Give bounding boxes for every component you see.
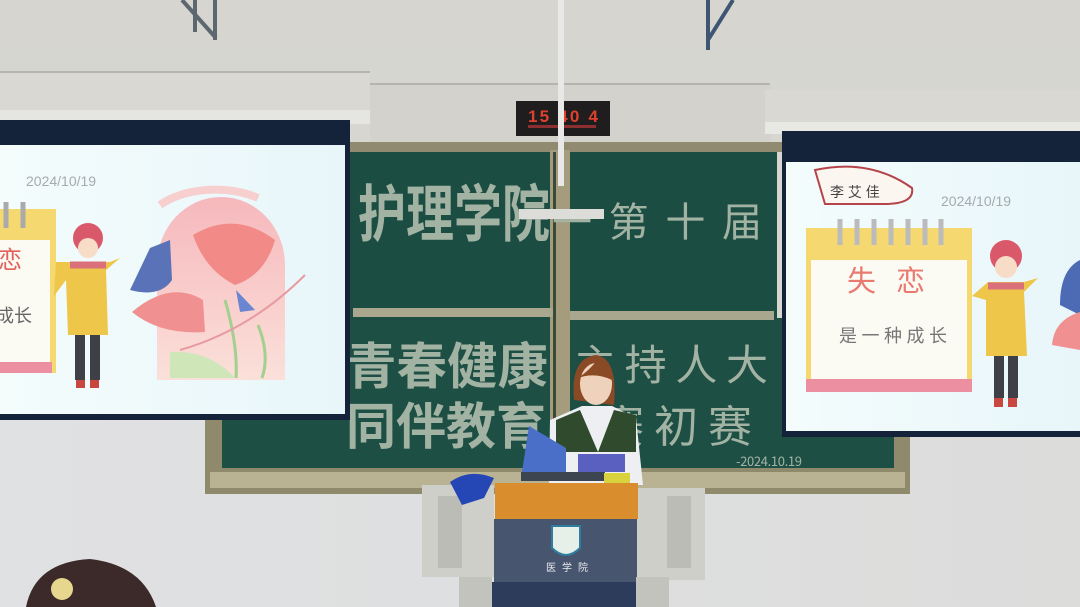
flower edge	[1052, 260, 1080, 350]
chalk title: 赛初赛	[600, 391, 752, 455]
right projection screen	[782, 131, 1080, 437]
chalk title	[346, 164, 802, 470]
blackboard	[205, 142, 910, 494]
digital clock: 15 40 4	[528, 107, 599, 126]
chalk title: 护理学院	[358, 164, 550, 254]
ceiling brackets	[182, 0, 733, 50]
chalk title: 同伴教育	[346, 387, 546, 459]
slide heading: 失恋	[847, 265, 925, 298]
slide date: 2024/10/19	[941, 193, 1011, 209]
podium	[422, 483, 705, 607]
chalk title: -2024.10.19	[736, 451, 802, 470]
ceiling trunking	[0, 72, 1080, 142]
chalk title: 一第十届	[552, 190, 762, 248]
slide date: 2024/10/19	[26, 173, 96, 189]
blue folder and laptop	[521, 426, 630, 485]
calendar card	[0, 202, 56, 373]
chalk title: 青春健康	[346, 327, 548, 399]
calendar card	[806, 219, 972, 392]
hanging pole and projector bracket	[519, 0, 604, 219]
flower illustration	[130, 190, 305, 380]
college name: 医学院	[546, 561, 588, 574]
presenter name tag	[815, 167, 912, 204]
presenter name tag: 李 艾 佳	[830, 184, 880, 200]
slide subheading: 是一种成长	[839, 326, 947, 346]
speaker	[549, 355, 643, 485]
cartoon girl	[54, 223, 120, 388]
audience head	[26, 559, 156, 607]
cartoon girl	[972, 240, 1038, 407]
blue cloth	[450, 474, 494, 505]
left projection screen	[0, 120, 350, 420]
college crest	[552, 526, 580, 555]
digital clock	[516, 101, 610, 136]
chalk title: 主持人大	[574, 332, 768, 393]
